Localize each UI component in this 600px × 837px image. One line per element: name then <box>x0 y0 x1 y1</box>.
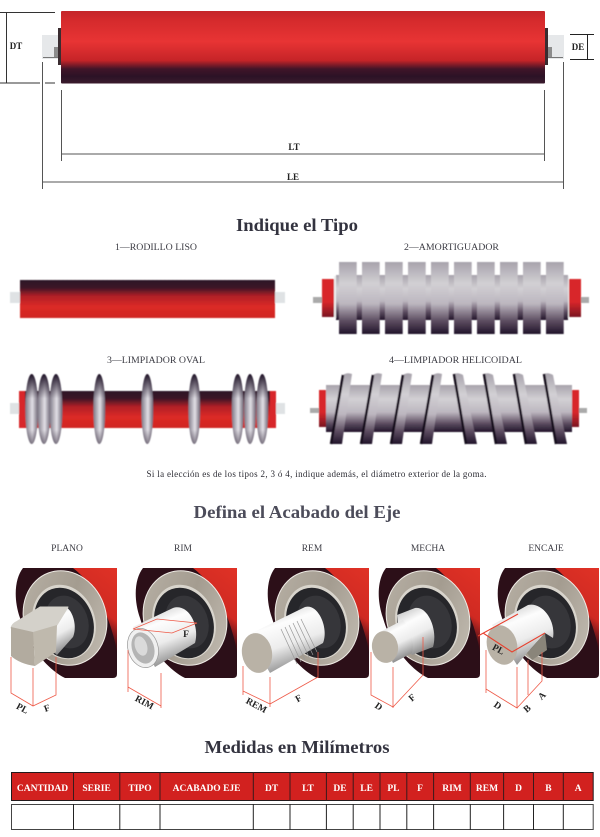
table header: F <box>417 784 423 794</box>
dimension DT <box>0 12 55 83</box>
table header: A <box>575 784 582 794</box>
panel: PLANO: PL <box>14 702 30 716</box>
main roller with dimensions <box>0 11 594 189</box>
panel: MECHA: F <box>407 693 418 704</box>
table header: ACABADO EJE <box>173 784 241 794</box>
heading: Defina el Acabado del Eje: Defina el Acabado del Eje <box>194 502 401 522</box>
roller type 3 <box>10 374 285 444</box>
panel: REM: F <box>294 693 304 705</box>
heading: Indique el Tipo: Indique el Tipo <box>236 215 358 235</box>
panel: PLANO <box>10 544 120 716</box>
label type 1: 1—RODILLO LISO <box>115 243 197 253</box>
panel: PLANO: F <box>43 703 52 715</box>
panel: RIM: F <box>183 630 189 640</box>
panel: ENCAJE: ENCAJE <box>528 544 564 554</box>
panel: REM: REM <box>302 544 323 554</box>
label type 3: 3—LIMPIADOR OVAL <box>107 356 205 366</box>
roller type 4 <box>310 373 587 444</box>
label type 4: 4—LIMPIADOR HELICOIDAL <box>389 356 522 366</box>
dimension DE <box>570 34 594 60</box>
table header: TIPO <box>128 784 152 794</box>
roller type 2 <box>313 262 589 334</box>
table header: D <box>515 784 522 794</box>
table header: REM <box>476 784 498 794</box>
table header: RIM <box>442 784 462 794</box>
panel: MECHA: MECHA <box>411 544 445 554</box>
panel: RIM: RIM <box>174 544 193 554</box>
panel: ENCAJE: D <box>491 700 503 713</box>
dimension LT <box>62 90 544 161</box>
table header: DE <box>333 784 347 794</box>
panel: MECHA: D <box>372 701 384 714</box>
roller shaft right <box>545 28 564 65</box>
dimension LE <box>42 62 564 189</box>
note text: Si la elección es de los tipos 2, 3 ó 4, indique además, el diámetro exterior de la goma. <box>146 469 486 479</box>
panel: RIM: RIM <box>133 694 155 712</box>
table header: CANTIDAD <box>17 784 68 794</box>
table header <box>12 772 593 801</box>
roller shaft left <box>42 28 61 65</box>
heading: Medidas en Milímetros: Medidas en Milímetros <box>204 737 390 757</box>
panel: ENCAJE: A <box>537 691 549 703</box>
table header: LE <box>360 784 373 794</box>
panel: REM <box>239 544 372 716</box>
roller body <box>61 11 545 84</box>
table header: SERIE <box>82 784 111 794</box>
dimension DT: DT <box>10 41 22 51</box>
panel: PLANO: PLANO <box>51 544 83 554</box>
panel: ENCAJE: B <box>522 703 534 715</box>
roller type 1 <box>10 280 285 318</box>
table header: B <box>545 784 552 794</box>
table header: DT <box>265 784 279 794</box>
table empty row <box>12 804 593 830</box>
panel: REM: REM <box>244 697 268 716</box>
dimension DE: DE <box>572 42 584 52</box>
table header: LT <box>302 784 315 794</box>
label type 2: 2—AMORTIGUADOR <box>404 243 500 253</box>
dimension LE: LE <box>287 172 299 182</box>
table header: PL <box>387 784 399 794</box>
dimension LT: LT <box>288 142 300 152</box>
panel: ENCAJE <box>478 544 600 715</box>
panel: RIM <box>123 544 240 712</box>
panel: MECHA <box>369 544 483 714</box>
panel: ENCAJE: PL <box>490 643 506 657</box>
